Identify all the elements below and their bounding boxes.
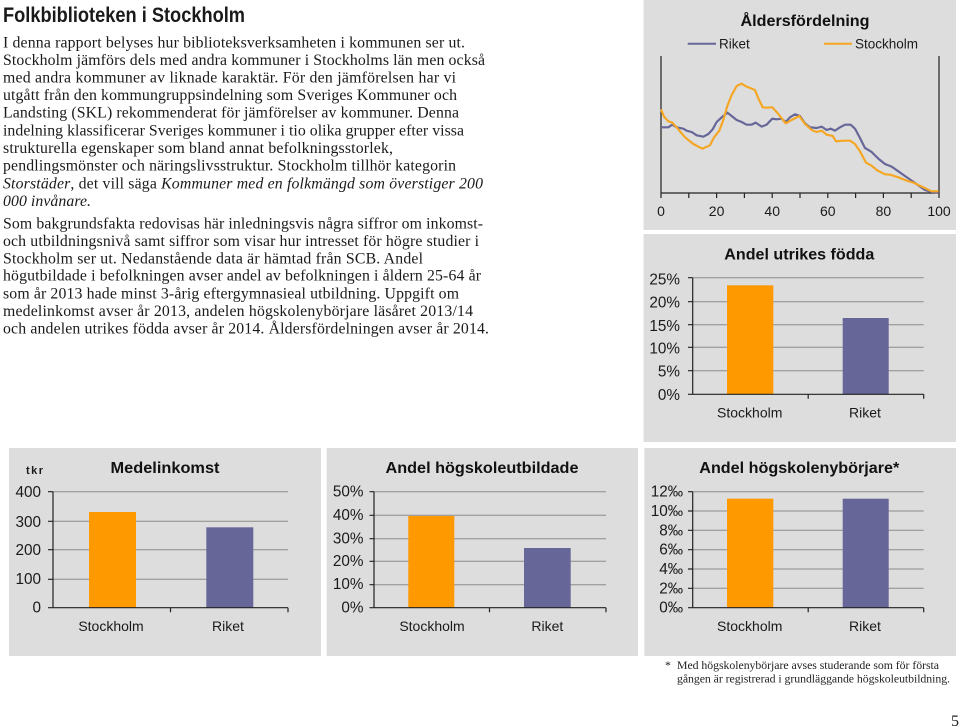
bar: Stockholm bbox=[727, 285, 773, 394]
y axis labels: 40% bbox=[333, 507, 364, 524]
x axis labels: Stockholm bbox=[78, 618, 144, 634]
y axis labels bbox=[649, 271, 680, 404]
text block: background facts: som år 2013 hade minst 3-årig eftergymnasieal utbildning. Uppgift om bbox=[3, 285, 460, 302]
text block: introduction bbox=[3, 35, 485, 210]
text block: introduction: Storstäder, det vill säga Kommuner med en folkmängd som överstiger 200 bbox=[3, 175, 483, 192]
x axis labels: Riket bbox=[531, 618, 563, 634]
heading: Andel högskolenybörjare: Andel högskolenybörjare* bbox=[699, 460, 900, 477]
x axis labels: Stockholm bbox=[717, 618, 782, 634]
text block: background facts: och utbildningsnivå samt siffror som visar hur intresset för högre studier i bbox=[3, 233, 480, 250]
bar: Stockholm bbox=[408, 516, 454, 608]
footnote: Med högskolenybörjare avses studerande som för första bbox=[677, 658, 940, 672]
x axis labels: 80 bbox=[876, 203, 891, 219]
text block: background facts bbox=[3, 215, 489, 337]
panel: average income bbox=[9, 448, 321, 656]
bar: Riket bbox=[843, 499, 889, 608]
x axis labels bbox=[717, 405, 881, 421]
x axis labels: 60 bbox=[820, 203, 836, 219]
y axis labels: 0 bbox=[32, 600, 41, 617]
chart axes bbox=[661, 56, 939, 198]
y axis labels: 200 bbox=[15, 542, 41, 559]
y axis labels: 8‰ bbox=[659, 522, 683, 539]
y axis labels bbox=[651, 484, 683, 617]
bar: Riket bbox=[524, 548, 571, 608]
line: Riket bbox=[661, 113, 939, 193]
y axis labels: 0‰ bbox=[659, 600, 683, 617]
y axis labels bbox=[333, 484, 364, 616]
legend: Riket bbox=[688, 36, 750, 51]
footnote bbox=[665, 658, 950, 685]
text block: introduction: strukturella egenskaper som bland annat befolkningsstorlek, bbox=[3, 140, 393, 157]
y axis labels: 0% bbox=[341, 599, 364, 616]
y axis labels: 2‰ bbox=[659, 580, 683, 597]
legend: Stockholm: Stockholm bbox=[855, 36, 918, 51]
legend: Stockholm bbox=[824, 36, 918, 51]
y axis labels: 6‰ bbox=[659, 542, 683, 559]
heading: Åldersfördelning: Åldersfördelning bbox=[740, 11, 870, 30]
title: Folkbiblioteken i Stockholm bbox=[3, 3, 245, 27]
text block: introduction: 000 invånare. bbox=[3, 193, 91, 210]
y axis labels: 0% bbox=[658, 387, 680, 404]
text block: introduction: med andra kommuner av liknade karaktär. För den jämförelsen har vi bbox=[3, 70, 457, 86]
x axis labels bbox=[399, 618, 563, 634]
bar: Riket bbox=[206, 527, 253, 608]
y axis labels: 10% bbox=[649, 340, 680, 357]
text block: background facts: medelinkomst avser år 2013, andelen högskolenybörjare läsåret 2013/14 bbox=[3, 303, 473, 320]
x axis labels: 20 bbox=[709, 203, 725, 219]
x axis labels bbox=[657, 203, 951, 219]
y axis labels bbox=[15, 484, 41, 617]
text block: introduction: Landsting (SKL) rekommenderat för jämförelser av kommuner. Denna bbox=[3, 104, 459, 122]
x axis labels bbox=[717, 618, 881, 634]
y axis labels: 10% bbox=[333, 576, 364, 593]
x axis labels: Riket bbox=[849, 405, 881, 421]
heading: Andel utrikes födda: Andel utrikes födda bbox=[724, 246, 874, 263]
y axis labels: 30% bbox=[333, 530, 364, 547]
x axis labels: 0 bbox=[657, 203, 665, 219]
footnote: gången är registrerad i grundläggande högskoleutbildning. bbox=[677, 671, 950, 685]
text block: background facts: högutbildade i befolkningen avser andel av befolkningen i åldern 25-64 år bbox=[3, 268, 482, 285]
x axis labels: Stockholm bbox=[399, 618, 465, 634]
bar: Stockholm bbox=[89, 512, 136, 608]
y axis labels: 12‰ bbox=[651, 484, 683, 501]
y axis labels: 20% bbox=[649, 295, 680, 312]
text block: background facts: Stockholm ser ut. Nedanstående data är hämtad från SCB. Andel bbox=[3, 250, 424, 267]
y axis labels: 400 bbox=[15, 484, 41, 501]
panel: new university students bbox=[644, 448, 956, 656]
y axis labels: 15% bbox=[649, 318, 680, 335]
y axis labels: 5% bbox=[658, 364, 680, 381]
text block: introduction: Stockholm jämförs dels med andra kommuner i Stockholms län men också bbox=[3, 52, 485, 69]
y axis labels: 20% bbox=[333, 553, 364, 570]
unit label: tkr: tkr bbox=[26, 465, 44, 477]
line: Stockholm bbox=[661, 84, 939, 191]
x axis labels: Riket bbox=[212, 618, 244, 634]
x axis labels: Riket bbox=[849, 618, 881, 634]
y axis labels: 10‰ bbox=[651, 503, 683, 520]
text block: introduction: indelning klassificerar Sveriges kommuner i tio olika grupper efter vissa bbox=[3, 122, 464, 139]
panel: age distribution line chart bbox=[644, 0, 956, 230]
x axis labels bbox=[78, 618, 244, 634]
panel: share highly educated bbox=[327, 448, 638, 656]
footnote: * bbox=[665, 658, 671, 672]
legend: Riket: Riket bbox=[719, 36, 750, 51]
text block: introduction: I denna rapport belyses hur biblioteksverksamheten i kommunen ser ut. bbox=[3, 35, 465, 52]
text block: background facts: och andelen utrikes födda avser år 2014. Åldersfördelningen avser år 2014. bbox=[3, 319, 489, 337]
heading: Medelinkomst: Medelinkomst bbox=[110, 460, 220, 477]
x axis labels: 40 bbox=[764, 203, 780, 219]
y axis labels: 50% bbox=[333, 484, 364, 501]
y axis labels: 25% bbox=[649, 271, 680, 288]
heading: Andel högskoleutbildade: Andel högskoleutbildade bbox=[386, 460, 579, 477]
text block: introduction: pendlingsmönster och näringslivsstruktur. Stockholm tillhör kategorin bbox=[3, 158, 456, 175]
y axis labels: 4‰ bbox=[659, 561, 683, 578]
x axis labels: Stockholm bbox=[717, 405, 782, 421]
bar: Stockholm bbox=[727, 499, 773, 608]
text block: background facts: Som bakgrundsfakta redovisas här inledningsvis några siffror om inkomst- bbox=[3, 215, 483, 232]
x axis labels: 100 bbox=[927, 203, 951, 219]
panel: share foreign born bbox=[644, 234, 956, 442]
text block: introduction: utgått från den kommungruppsindelning som Sveriges Kommuner och bbox=[3, 87, 457, 104]
y axis labels: 300 bbox=[15, 514, 41, 531]
y axis labels: 100 bbox=[15, 571, 41, 588]
bar: Riket bbox=[843, 318, 889, 394]
